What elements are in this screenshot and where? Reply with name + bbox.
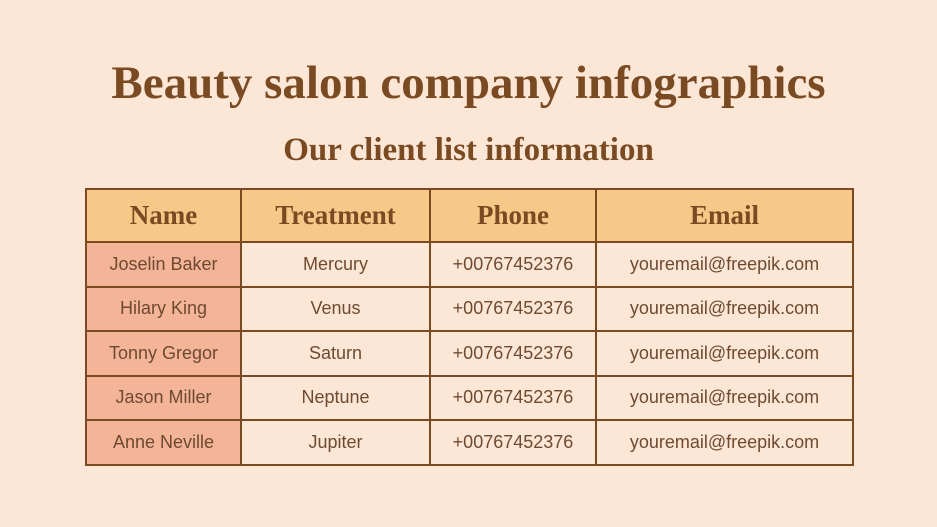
table: client list: +00767452376: [453, 432, 573, 452]
table: client list: +00767452376: [453, 343, 573, 363]
table: client list: Neptune: [301, 387, 370, 407]
table: client list: [85, 188, 854, 466]
table: client list: youremail@freepik.com: [630, 432, 819, 452]
table: client list: Mercury: [303, 254, 368, 274]
table: client list: Phone: [477, 200, 549, 230]
table: client list: Tonny Gregor: [109, 343, 218, 363]
table: client list: youremail@freepik.com: [630, 298, 819, 318]
table: client list: Venus: [310, 298, 361, 318]
table: client list: Hilary King: [120, 298, 207, 318]
table: client list: Joselin Baker: [109, 254, 218, 274]
title: Beauty salon company infographics: [111, 57, 826, 109]
table: client list: +00767452376: [453, 254, 573, 274]
table: client list: Jason Miller: [115, 387, 212, 407]
table: client list: youremail@freepik.com: [630, 387, 819, 407]
table: client list: +00767452376: [453, 298, 573, 318]
table: client list: +00767452376: [453, 387, 573, 407]
table: client list: Treatment: [275, 200, 396, 230]
table: client list: Email: [690, 200, 759, 230]
table: client list: Anne Neville: [113, 432, 214, 452]
table: client list: youremail@freepik.com: [630, 343, 819, 363]
table: client list: Saturn: [309, 343, 362, 363]
table: client list: Jupiter: [308, 432, 363, 452]
table: client list: youremail@freepik.com: [630, 254, 819, 274]
table: client list: Name: [130, 200, 197, 230]
subtitle: Our client list information: [283, 132, 654, 168]
